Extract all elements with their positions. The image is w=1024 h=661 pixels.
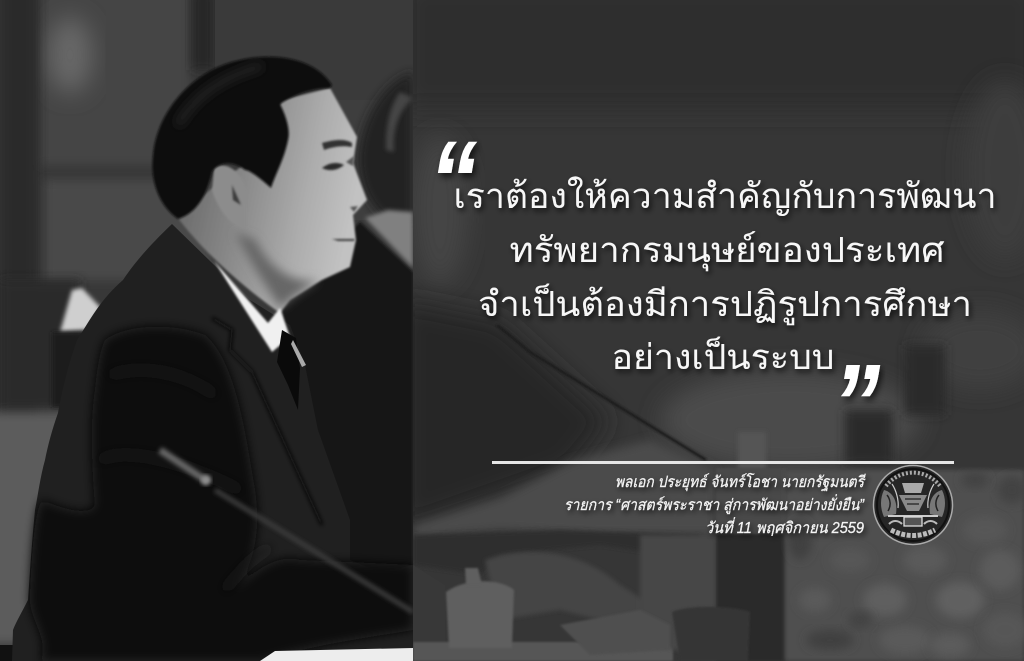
suit folds — [100, 370, 270, 590]
microphone — [160, 450, 413, 612]
hand — [485, 552, 640, 618]
person: suit — [12, 224, 413, 661]
microphone stalk — [497, 325, 706, 460]
ear — [211, 164, 236, 214]
hair — [152, 57, 332, 219]
dark vertical bar — [717, 532, 785, 661]
dark band — [414, 529, 660, 570]
suit sleeve shadow — [30, 327, 413, 661]
attribution text — [564, 473, 866, 537]
attribution: date: วันที่ 11 พฤศจิกายน 2559 — [705, 517, 864, 537]
divider line — [492, 461, 954, 464]
lapel line — [212, 318, 322, 525]
flowers — [785, 470, 1024, 661]
emblem base — [888, 515, 938, 517]
nostril — [350, 206, 358, 212]
background dark object — [52, 332, 88, 407]
panel: photo of speaker — [0, 0, 413, 661]
cup 2 — [672, 607, 750, 661]
closing quotation mark: ” — [832, 341, 880, 464]
emblem top rays — [886, 473, 940, 486]
papers — [560, 612, 668, 644]
opening quotation mark: “ — [429, 118, 477, 241]
attribution: programme: รายการ “ศาสตร์พระราชา สู่การพัฒนาอย่างยั่งยืน” — [564, 494, 865, 515]
quote line 2: ทรัพยากรมนุษย์ของประเทศ — [510, 231, 944, 271]
panel: dark quote background — [413, 96, 1024, 661]
tie — [277, 330, 300, 410]
attribution: name: พลเอก ประยุทธ์ จันทร์โอชา นายกรัฐมนตรี — [615, 473, 866, 492]
paper on table — [260, 648, 413, 661]
pin — [291, 340, 306, 367]
person behind — [282, 72, 413, 568]
table — [413, 642, 673, 661]
cup — [446, 581, 514, 648]
quote line 4: อย่างเป็นระบบ — [612, 336, 834, 377]
hair highlight — [178, 66, 262, 125]
icon: government emblem — [874, 466, 952, 544]
emblem lions — [881, 490, 896, 517]
eye and brow — [322, 140, 358, 241]
shirt collar — [214, 261, 290, 352]
blurred background photo — [400, 0, 1024, 661]
emblem urn — [902, 483, 924, 493]
background wall — [0, 0, 413, 661]
bottle — [738, 432, 766, 470]
arm — [413, 440, 716, 538]
quote line 3: จำเป็นต้องมีการปฏิรูปการศึกษา — [478, 283, 972, 325]
quote line 1: เราต้องให้ความสำคัญกับการพัฒนา — [454, 176, 996, 216]
quote text — [454, 176, 996, 377]
neck shadow — [235, 232, 320, 308]
flower — [60, 288, 101, 332]
neck and face — [178, 88, 367, 313]
